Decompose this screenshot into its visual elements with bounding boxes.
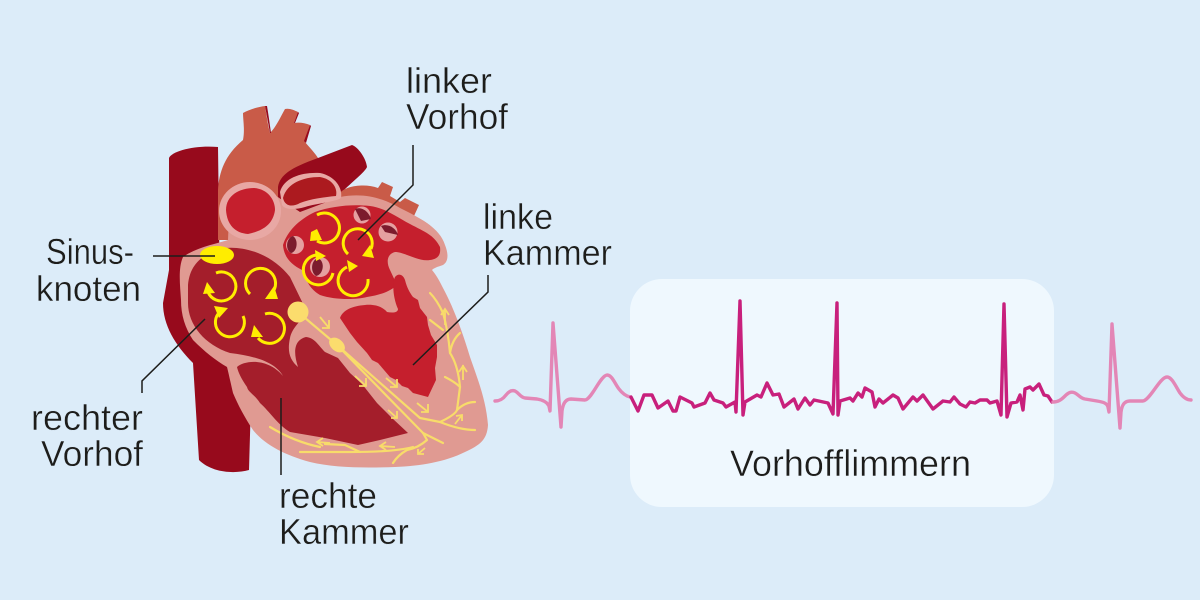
aorta branch shadows [265, 106, 311, 143]
left atrium chamber [283, 205, 440, 299]
aorta [218, 106, 340, 240]
AV node [288, 302, 308, 322]
label: linke Kammer [483, 196, 612, 273]
aorta ring [219, 182, 281, 240]
pulmonary vein openings [286, 206, 398, 277]
left atrium top and pulmonary veins [340, 182, 441, 260]
sinus node [200, 246, 234, 264]
label: Sinusknoten: Sinus- [46, 231, 134, 272]
label: rechter Vorhof [31, 397, 144, 474]
label: rechte Kammer: Kammer [279, 511, 409, 552]
conduction system [270, 293, 475, 463]
pulmonary opening [283, 177, 336, 206]
right atrium and right ventricle [188, 248, 408, 445]
label: Vorhofflimmern: Vorhofflimmern [730, 443, 971, 484]
label: linker Vorhof [406, 60, 509, 137]
panel: Vorhofflimmern highlight [630, 279, 1054, 507]
conduction arrows [317, 309, 467, 454]
pulmonary artery [278, 145, 367, 215]
label: linke Kammer: Kammer [483, 232, 612, 273]
label: rechter Vorhof: Vorhof [41, 433, 144, 474]
label: linker Vorhof: Vorhof [406, 96, 509, 137]
label: rechte Kammer [279, 475, 409, 552]
leader lines [142, 145, 488, 475]
label: Sinusknoten [36, 231, 141, 309]
label: linker Vorhof: linker [406, 60, 492, 101]
label: rechte Kammer: rechte [279, 475, 377, 516]
ECG: atrial fibrillation trace [631, 301, 1052, 417]
label: linke Kammer: linke [483, 196, 553, 237]
aorta opening [226, 188, 275, 234]
heart muscle wall [180, 185, 488, 467]
label: Sinusknoten: knoten [36, 268, 141, 309]
fibrillation circle arrows [208, 213, 372, 343]
pulmonary ring [280, 173, 341, 209]
label: rechter Vorhof: rechter [31, 397, 143, 438]
bundle of His [326, 335, 348, 355]
arrowheads of circle arrows [203, 229, 374, 337]
ECG: normal rhythm left [495, 323, 630, 427]
ECG: normal rhythm right [1053, 324, 1191, 428]
vena cava [163, 147, 251, 472]
left ventricle [340, 275, 437, 397]
heart illustration [163, 106, 488, 472]
